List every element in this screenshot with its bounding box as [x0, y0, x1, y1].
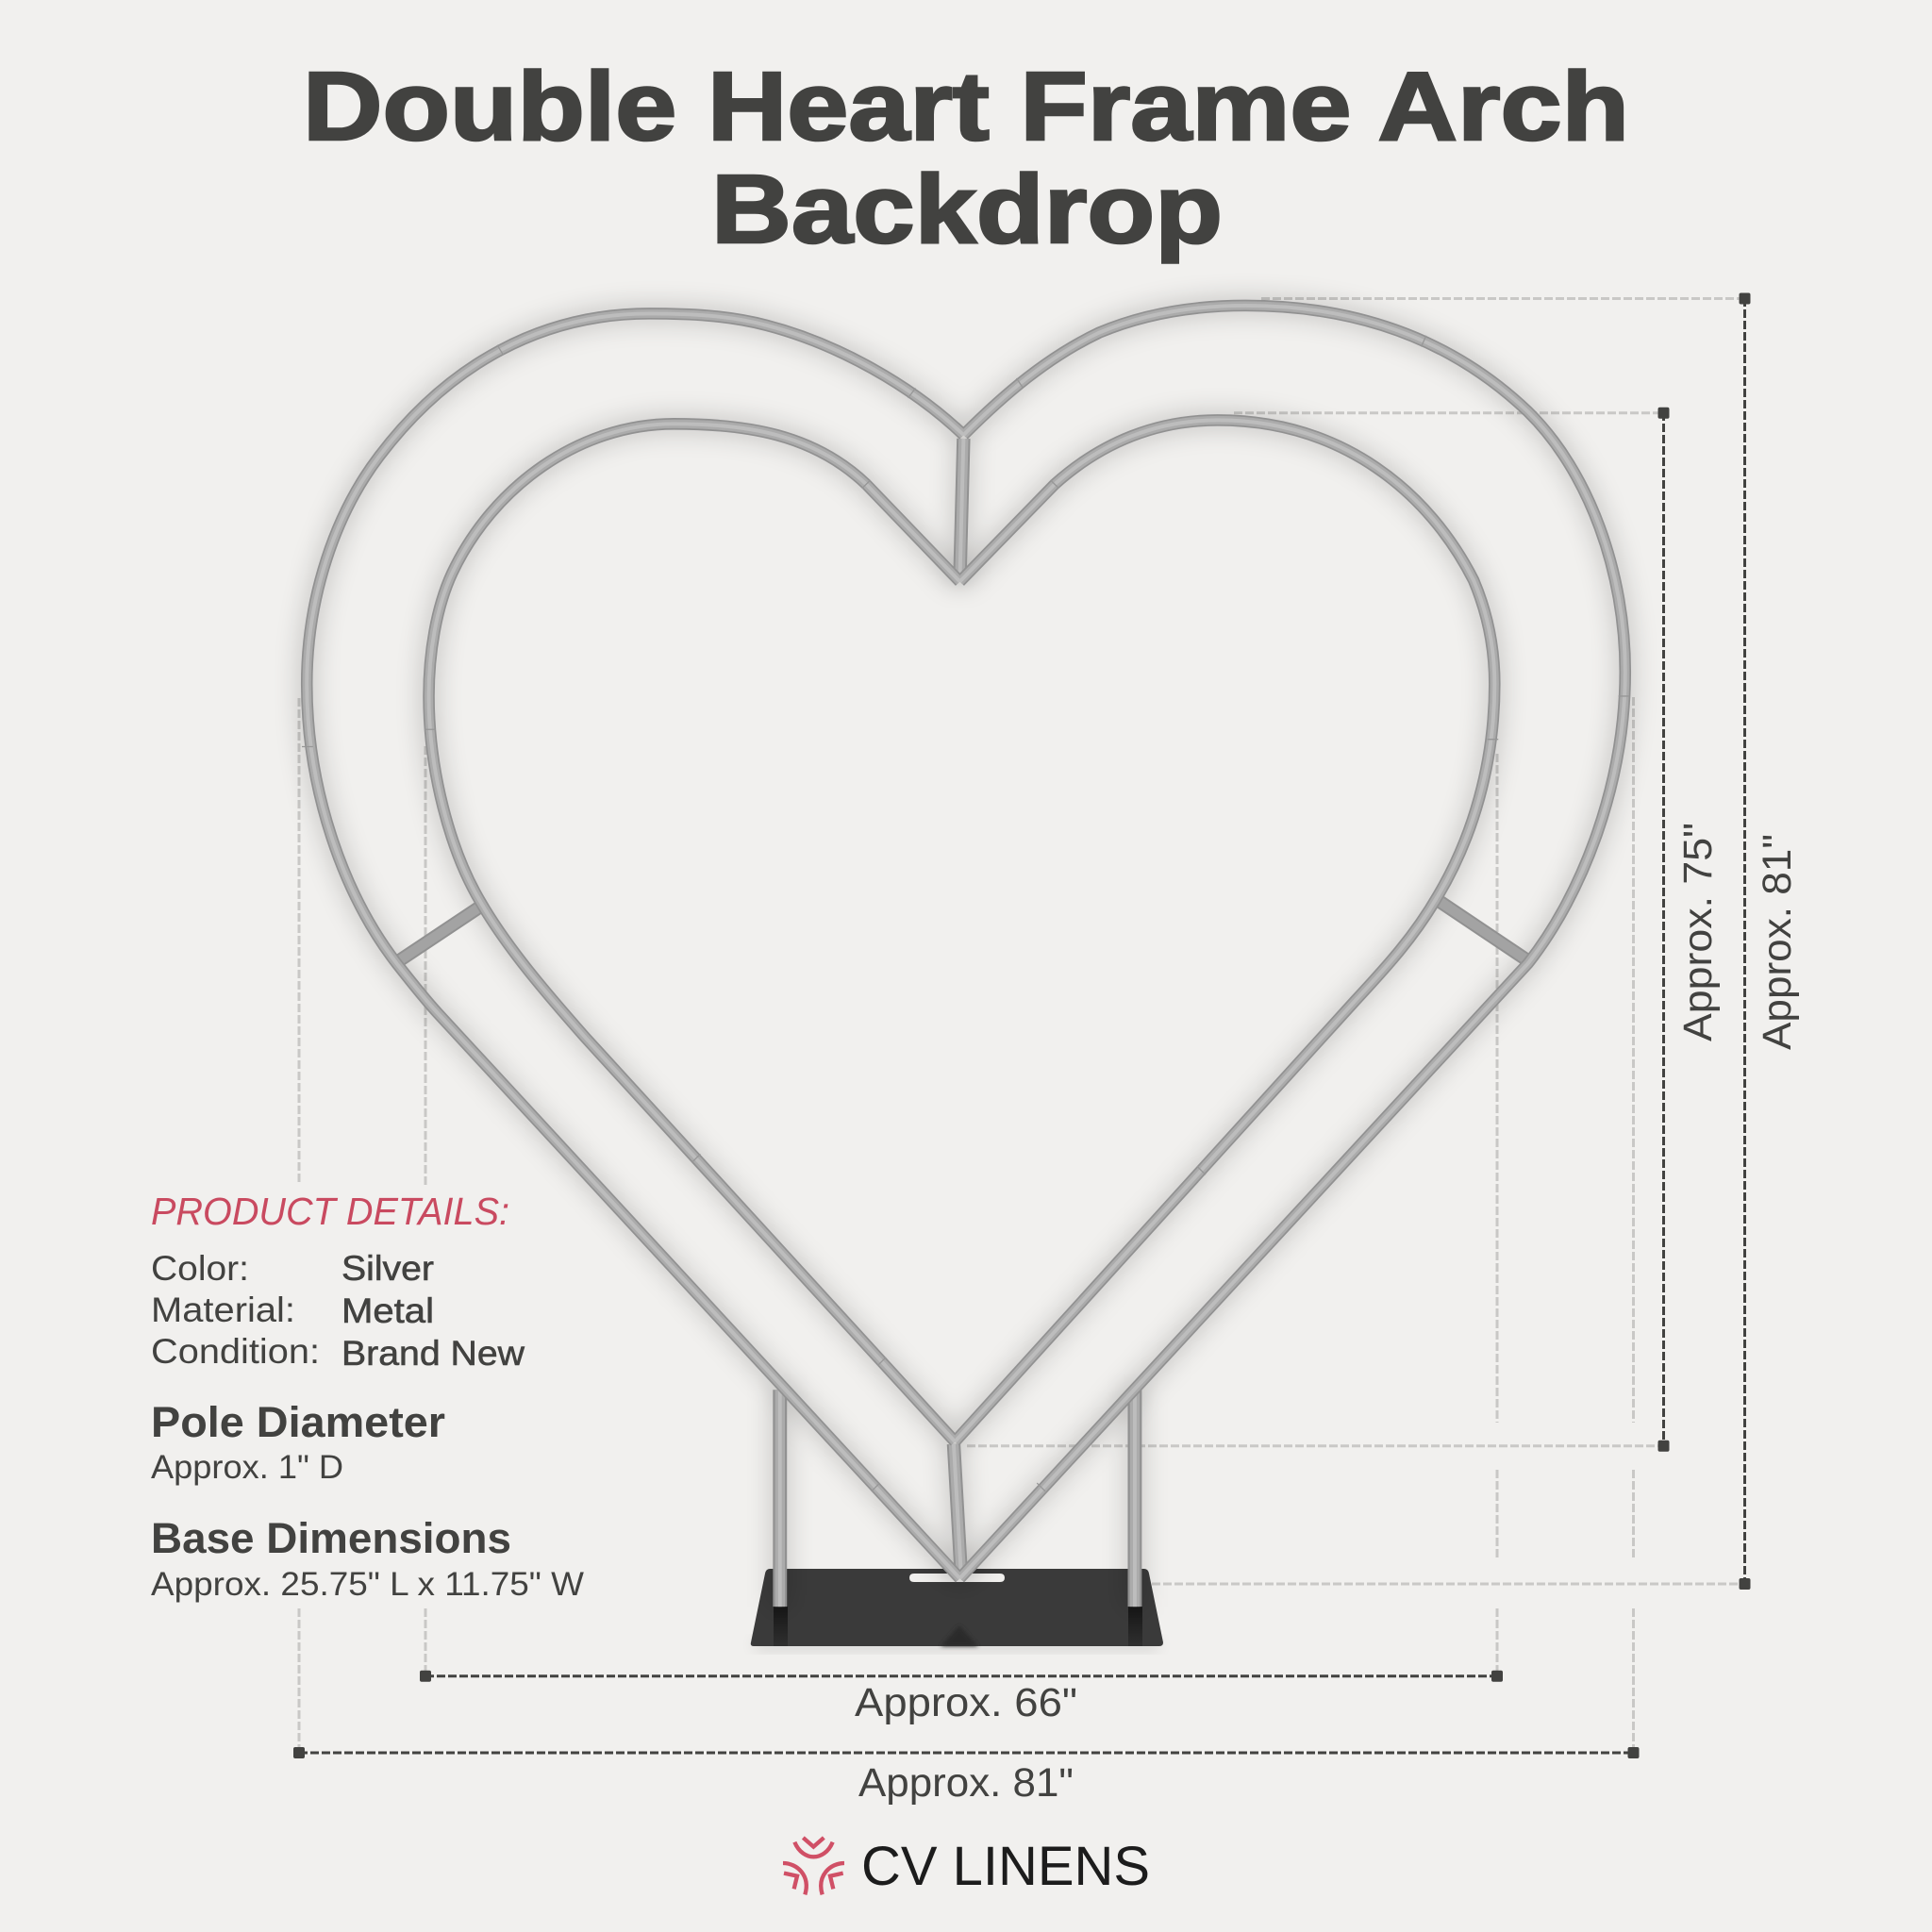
dimension: inner height: Approx. 75"	[1675, 823, 1721, 1041]
dimension: inner width	[420, 1671, 1503, 1725]
color row: Color:	[151, 1249, 249, 1288]
tube joints	[302, 336, 1629, 1491]
base dimensions	[151, 1514, 584, 1603]
condition row: Brand New	[341, 1334, 525, 1373]
color row: Silver	[341, 1249, 434, 1288]
metal base plate	[751, 1569, 1163, 1649]
product details heading: PRODUCT DETAILS:	[151, 1190, 509, 1233]
title: Double Heart Frame Arch	[303, 52, 1629, 160]
dimension: outer height: Approx. 81"	[1755, 834, 1800, 1050]
frame soft shadow	[307, 306, 1625, 1607]
pole diameter	[151, 1398, 445, 1486]
dimension: inner height	[1658, 408, 1721, 1452]
base dimensions: Approx. 25.75" L x 11.75" W	[151, 1566, 584, 1603]
base dimensions: Base Dimensions	[151, 1514, 511, 1562]
heart arch frame	[302, 306, 1629, 1607]
wordmark: CV LINENS	[861, 1836, 1150, 1897]
outer heart tube	[307, 306, 1625, 1578]
strut braces	[397, 899, 1530, 962]
condition row: Condition:	[151, 1332, 320, 1371]
material row: Material:	[151, 1291, 295, 1329]
dimension: outer width: Approx. 81"	[858, 1760, 1074, 1806]
icon: CV Linens mark	[783, 1838, 844, 1894]
support legs	[780, 1390, 1135, 1607]
pole diameter: Approx. 1" D	[151, 1449, 343, 1486]
light dashed guide lines	[299, 298, 1740, 1747]
color row	[151, 1249, 434, 1288]
dimension: outer height	[1740, 292, 1800, 1590]
dimension: inner width: Approx. 66"	[855, 1680, 1077, 1725]
condition row	[151, 1332, 525, 1373]
dimension: outer width	[293, 1747, 1640, 1806]
material row	[151, 1291, 434, 1330]
inner heart tube	[429, 420, 1494, 1441]
connector poles	[954, 439, 963, 1574]
product details block	[151, 1190, 584, 1603]
pole diameter: Pole Diameter	[151, 1398, 445, 1446]
brand logo	[783, 1836, 1150, 1897]
title	[303, 52, 1629, 263]
material row: Metal	[341, 1291, 434, 1330]
title: Backdrop	[711, 155, 1223, 263]
